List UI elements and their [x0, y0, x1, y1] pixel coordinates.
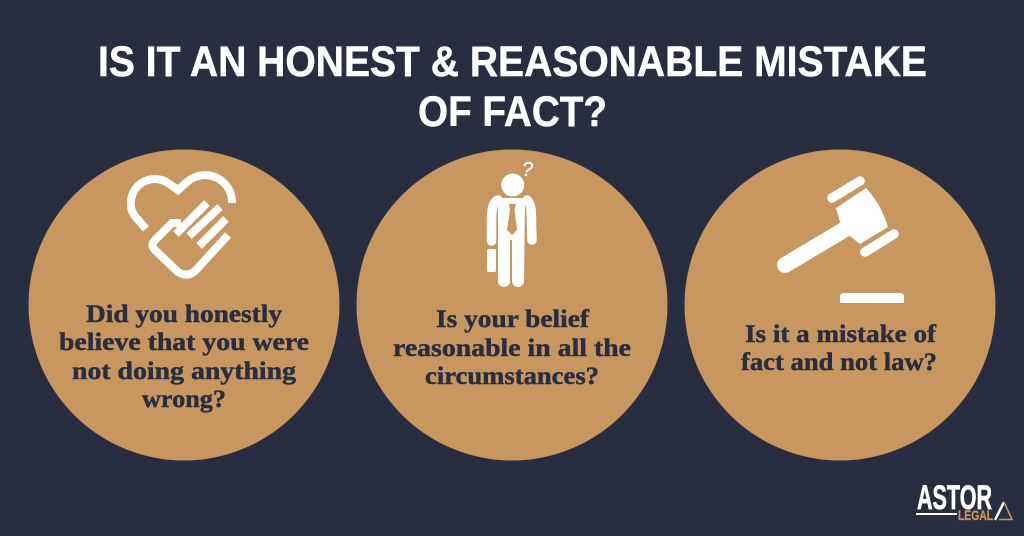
text: honest belief question: Did you honestly: [86, 301, 283, 328]
text: honest belief question: believe that you were: [59, 329, 309, 356]
title: IS IT AN HONEST & REASONABLE MISTAKE: [98, 38, 927, 86]
circle background: honest belief: [28, 150, 340, 460]
panel: fact not law: [684, 150, 996, 460]
text: fact not law question: [741, 321, 937, 376]
icon: thinking man with briefcase: [487, 159, 534, 287]
logo: Astor Legal: LEGAL: [958, 508, 993, 523]
icon: thinking man with briefcase: ?: [522, 159, 534, 181]
panel: reasonable belief: [356, 150, 668, 460]
panel: honest belief: [28, 150, 340, 460]
text: fact not law question: Is it a mistake of: [745, 321, 937, 348]
icon: heart and hand: [131, 175, 232, 275]
icon: gavel: [785, 181, 904, 303]
text: honest belief question: wrong?: [142, 386, 226, 413]
text: reasonable belief question: [393, 306, 631, 390]
text: honest belief question: not doing anything: [72, 358, 297, 385]
title: OF FACT?: [418, 88, 607, 136]
text: reasonable belief question: circumstances?: [425, 363, 599, 390]
title: [98, 38, 927, 136]
circle background: fact not law: [684, 150, 996, 460]
text: reasonable belief question: Is your belief: [436, 306, 590, 333]
text: fact not law question: fact and not law?: [741, 349, 937, 376]
text: reasonable belief question: reasonable in all the: [393, 335, 631, 362]
text: honest belief question: [59, 301, 309, 413]
circle background: reasonable belief: [356, 150, 668, 460]
